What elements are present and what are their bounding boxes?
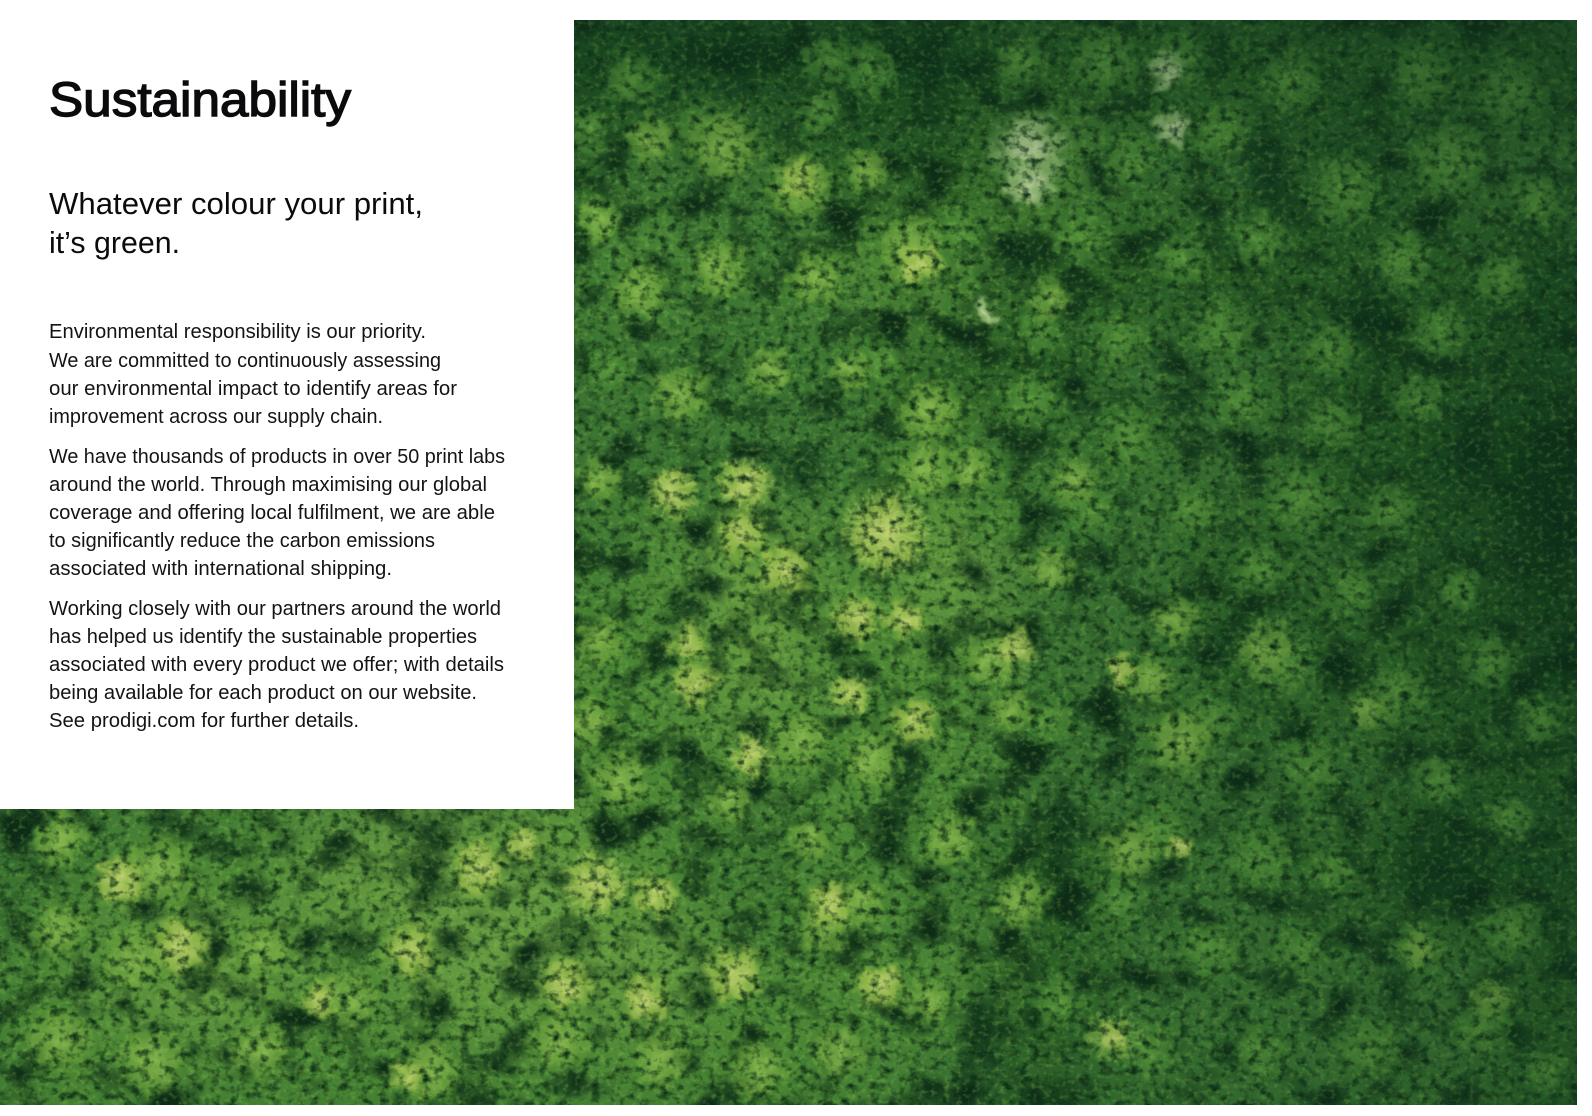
title: Sustainability [49,74,351,127]
text block: partners and product details: See prodigi.com for further details. [49,710,359,732]
subtitle [49,186,423,260]
text block: partners and product details [49,598,504,732]
text block: print labs and carbon emissions: to significantly reduce the carbon emissions [49,530,435,552]
text block: partners and product details: Working closely with our partners around the world [49,598,501,620]
text block: environmental responsibility: our environmental impact to identify areas for [49,378,457,400]
text block: environmental responsibility: Environmental responsibility is our priority. [49,321,426,343]
text block: environmental responsibility [49,321,457,428]
text block: partners and product details: associated with every product we offer; with details [49,654,504,676]
subtitle: Whatever colour your print, [49,186,423,221]
text block: print labs and carbon emissions: around the world. Through maximising our global [49,474,487,496]
subtitle: it’s green. [49,225,180,260]
text block: print labs and carbon emissions: coverage and offering local fulfilment, we are able [49,502,495,524]
text block: print labs and carbon emissions [49,446,505,580]
panel: white text panel [0,0,574,809]
text block: environmental responsibility: We are committed to continuously assessing [49,350,441,372]
text block: partners and product details: has helped us identify the sustainable properties [49,626,477,648]
text block: print labs and carbon emissions: We have thousands of products in over 50 print labs [49,446,505,468]
text block: print labs and carbon emissions: associated with international shipping. [49,558,392,580]
sunlit needle spokes on bright crowns [578,470,1293,1049]
text block: partners and product details: being available for each product on our website. [49,682,477,704]
text block: environmental responsibility: improvement across our supply chain. [49,406,383,428]
